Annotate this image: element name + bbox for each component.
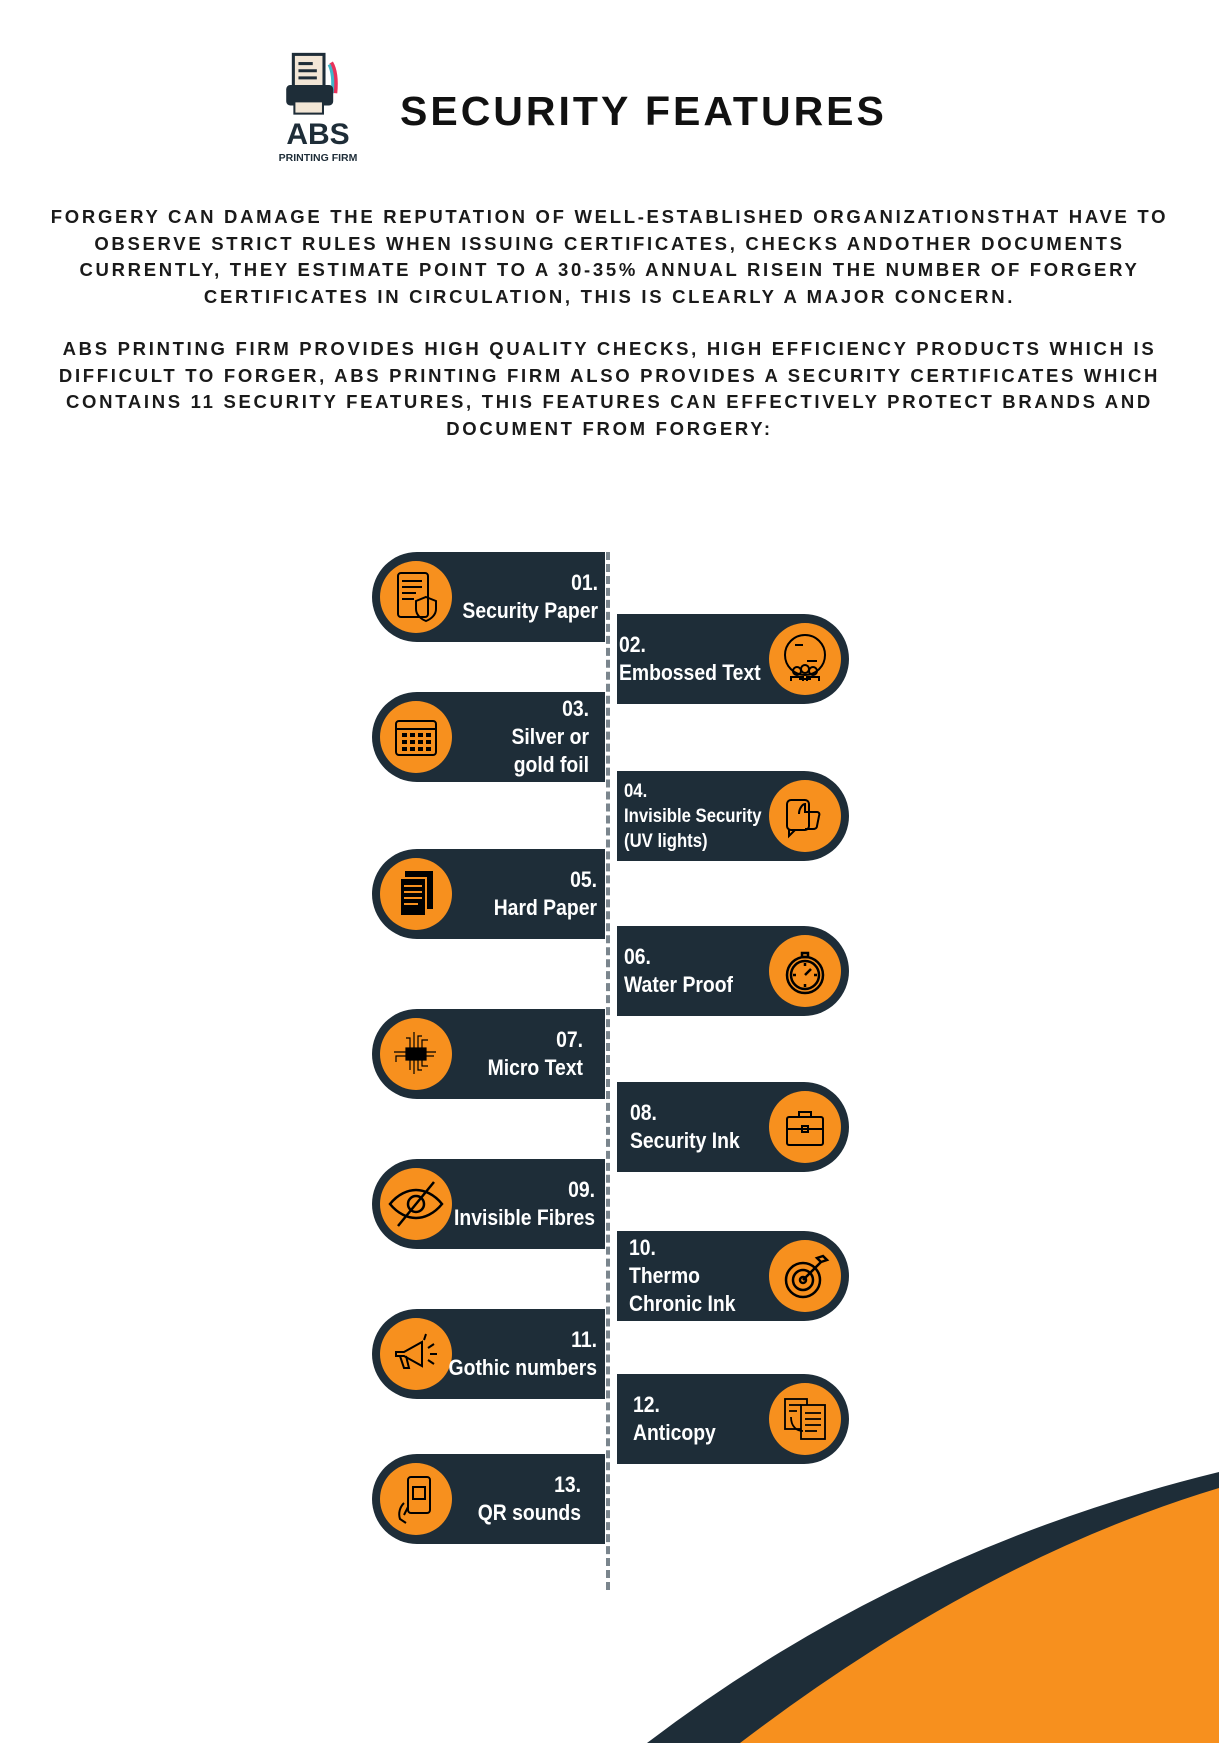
item 09: Invisible Fibres <box>454 1205 595 1230</box>
item 07: 07. <box>556 1027 583 1052</box>
intro paragraph 1: OBSERVE STRICT RULES WHEN ISSUING CERTIFICATES, CHECKS ANDOTHER DOCUMENTS <box>94 233 1125 254</box>
item 08 <box>617 1082 849 1172</box>
item 12: Anticopy <box>633 1420 716 1445</box>
item 12 <box>617 1374 849 1464</box>
intro paragraph 2: DIFFICULT TO FORGER, ABS PRINTING FIRM ALSO PROVIDES A SECURITY CERTIFICATES WHICH <box>59 365 1160 386</box>
item 02 <box>617 614 849 704</box>
intro paragraph 2: DOCUMENT FROM FORGERY: <box>446 418 773 439</box>
title: SECURITY FEATURES <box>400 88 887 134</box>
item 03: 03. <box>562 696 589 721</box>
item 08: Security Ink <box>630 1128 740 1153</box>
item 13: QR sounds <box>478 1500 581 1525</box>
item 10: 10. <box>629 1235 656 1260</box>
item 12: 12. <box>633 1392 660 1417</box>
item 09 <box>372 1159 605 1249</box>
logo: ABS <box>286 118 350 151</box>
item 06 <box>617 926 849 1016</box>
item 03: gold foil <box>514 752 589 777</box>
item 07 <box>372 1009 605 1099</box>
item 09: 09. <box>568 1177 595 1202</box>
item 06: Water Proof <box>624 972 733 997</box>
item 01 <box>372 552 605 642</box>
item 03: Silver or <box>512 724 589 749</box>
item 04 <box>617 771 849 861</box>
item 11: Gothic numbers <box>449 1355 597 1380</box>
item 11 <box>372 1309 605 1399</box>
item 04: Invisible Security <box>624 806 762 826</box>
item 02: 02. <box>619 632 646 657</box>
item 13: 13. <box>554 1472 581 1497</box>
item 13 <box>372 1454 605 1544</box>
item 05: 05. <box>570 867 597 892</box>
timeline dashed line <box>606 552 610 1590</box>
intro paragraph 2: ABS PRINTING FIRM PROVIDES HIGH QUALITY CHECKS, HIGH EFFICIENCY PRODUCTS WHICH IS <box>63 338 1156 359</box>
item 02: Embossed Text <box>619 660 761 685</box>
item 03 <box>372 692 605 782</box>
item 05: Hard Paper <box>494 895 597 920</box>
item 08: 08. <box>630 1100 657 1125</box>
text: PRINTING FIRM <box>279 152 357 164</box>
intro paragraph 1: CERTIFICATES IN CIRCULATION, THIS IS CLEARLY A MAJOR CONCERN. <box>204 286 1015 307</box>
logo <box>279 52 357 164</box>
item 05 <box>372 849 605 939</box>
item 04: (UV lights) <box>624 830 708 852</box>
item 07: Micro Text <box>488 1055 583 1080</box>
item 04: 04. <box>624 780 647 802</box>
intro paragraph 1: CURRENTLY, THEY ESTIMATE POINT TO A 30-35% ANNUAL RISEIN THE NUMBER OF FORGERY <box>80 259 1139 280</box>
item 01: 01. <box>571 570 598 595</box>
item 10: Chronic Ink <box>629 1291 735 1316</box>
intro paragraph 1: FORGERY CAN DAMAGE THE REPUTATION OF WELL-ESTABLISHED ORGANIZATIONSTHAT HAVE TO <box>51 206 1168 227</box>
item 01: Security Paper <box>462 598 598 623</box>
item 11: 11. <box>571 1327 597 1352</box>
item 10 <box>617 1231 849 1321</box>
intro paragraph 2: CONTAINS 11 SECURITY FEATURES, THIS FEATURES CAN EFFECTIVELY PROTECT BRANDS AND <box>66 391 1153 412</box>
intro paragraph 2 <box>59 338 1160 439</box>
item 10: Thermo <box>629 1263 700 1288</box>
intro paragraph 1 <box>51 206 1168 307</box>
item 06: 06. <box>624 944 651 969</box>
